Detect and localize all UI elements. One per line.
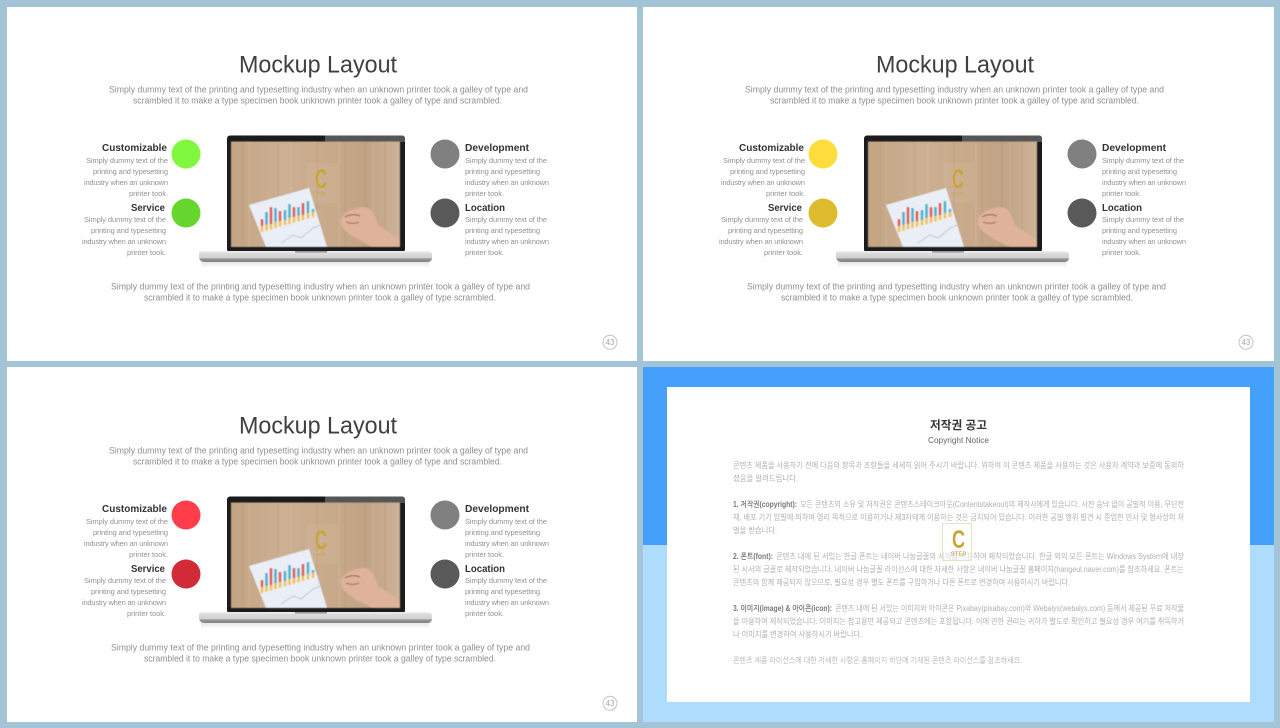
page number: 43: [606, 338, 615, 347]
laptop mockup: STEP: [316, 552, 327, 556]
item: Development: printing and typesetting: [1102, 167, 1177, 176]
item: Service: Service: [768, 203, 802, 214]
item: Location: Simply dummy text of the: [1102, 215, 1184, 224]
item: Service: Service: [131, 203, 165, 214]
laptop mockup: [199, 496, 432, 629]
text block: font clause: 2. 폰트(font):: [733, 552, 773, 561]
bottom text: [111, 280, 530, 302]
item: Customizable: Customizable: [102, 504, 167, 515]
item: Service: [82, 564, 166, 618]
item: Service: industry when an unknown: [719, 237, 803, 246]
item: Development: Development: [465, 143, 530, 154]
heading: copyright notice: [928, 418, 989, 445]
item: Location: industry when an unknown: [465, 598, 549, 607]
item: Location: industry when an unknown: [465, 237, 549, 246]
icon: Development circle: [430, 140, 460, 168]
item: Development: industry when an unknown: [465, 539, 549, 548]
laptop mockup: [836, 136, 1069, 268]
text block: image clause: 을 이용하여 제작되었습니다. 이미지는 참고용만 제공되고 콘텐츠에는 포함됩니다. 이에 관한 권리는 귀하가 별도로 확인하고 필요성 경우 여기를 취득하거: [733, 616, 1184, 626]
icon: Service circle: [172, 560, 200, 588]
laptop mockup: STEP: [316, 190, 327, 196]
text block: closing line: 콘텐츠 제품 라이선스에 대한 자세한 사항은 홈페이지 하단에 기재된 콘텐츠 라이선스를 참조하세요.: [733, 656, 1022, 665]
icon: Location circle: [1068, 198, 1096, 228]
icon: Customizable circle: [172, 140, 200, 168]
icon: Location circle: [430, 560, 460, 588]
item: Development: printer took.: [465, 189, 504, 198]
icon: Location circle: [430, 198, 460, 228]
text block: font clause: 콘텐츠 내에 된 서있는 한글 폰트는 네이버 나눔글꼴의 서체를 사용하여 제작되었습니다. 한글 외의 모든 폰트는 Windows System에 내장: [776, 551, 1185, 561]
item: Customizable: industry when an unknown: [721, 178, 805, 187]
panel: red slide: [7, 367, 637, 722]
laptop mockup: C: [952, 164, 964, 194]
icon: Development circle: [1068, 140, 1096, 168]
icon: Customizable circle: [172, 500, 200, 530]
laptop mockup: C: [315, 164, 327, 194]
item: Customizable: [84, 504, 168, 559]
item: Location: [1102, 203, 1186, 257]
subtitle text: Simply dummy text of the printing and typesetting industry when an unknown printer took a galley of type and: [745, 84, 1164, 94]
item: Location: printer took.: [1102, 248, 1141, 257]
item: Customizable: Simply dummy text of the: [86, 517, 168, 526]
logo watermark: STEP: [951, 552, 966, 558]
icon: Service circle: [172, 198, 200, 228]
text block: font clause: 된 시서의 글꼴로 제작되었습니다. 네이버 나눔글꼴 라이선스에 대한 자세한 사항은 네이버 나눔글꼴 홈페이지(hangeul.naver.com)를 참조하세요. 폰트는: [733, 564, 1184, 574]
item: Location: printing and typesetting: [465, 587, 540, 596]
page number: [1239, 335, 1253, 349]
item: Customizable: [84, 143, 168, 198]
title: Mockup Layout: [239, 52, 397, 78]
text block: font clause: [733, 551, 1185, 587]
item: Development: Simply dummy text of the: [1102, 156, 1184, 165]
subtitle text: [109, 444, 528, 466]
panel: green slide: [7, 7, 637, 361]
item: Service: printing and typesetting: [728, 226, 803, 235]
item: Service: printer took.: [764, 248, 803, 257]
text block: intro: 콘텐츠 제품을 사용하기 전에 다음의 항목과 조항들을 세세히 읽어 주시기 바랍니다. 위하여 이 콘텐츠 제품을 사용하는 것은 사용자 계약과 보증에 동의하: [733, 460, 1185, 470]
text block: copyright clause: 재, 배포 기기 임빌에 의하여 영리 목적으로 이용하거나 제3자에게 이용하는 것은 금지되어 있습니다. 이러한 공빌 행위 발견 시 준엄한 민사 및 형사상의 처: [733, 512, 1184, 522]
laptop mockup: [199, 136, 432, 268]
text block: image clause: 3. 이미지(image) & 아이콘(icon):: [733, 604, 832, 613]
item: Customizable: printer took.: [129, 550, 168, 559]
bottom text: Simply dummy text of the printing and typesetting industry when an unknown printer took a galley of type and: [747, 280, 1166, 292]
item: Location: industry when an unknown: [1102, 237, 1186, 246]
subtitle text: scrambled it to make a type specimen book unknown printer took a galley of type and scrambled.: [770, 94, 1139, 106]
item: Service: Simply dummy text of the: [84, 215, 166, 224]
item: Location: Location: [1102, 203, 1142, 214]
logo watermark: C: [952, 526, 965, 554]
item: Customizable: printing and typesetting: [93, 528, 168, 537]
bottom text: scrambled it to make a type specimen book unknown printer took a galley of type scrambled.: [781, 292, 1133, 302]
item: Customizable: [721, 143, 805, 198]
item: Development: [1102, 143, 1186, 198]
item: Service: [719, 203, 803, 257]
item: Service: industry when an unknown: [82, 598, 166, 607]
item: Customizable: printing and typesetting: [730, 167, 805, 176]
subtitle text: [745, 84, 1164, 106]
item: Customizable: Simply dummy text of the: [86, 156, 168, 165]
item: Development: printer took.: [1102, 189, 1141, 198]
icon: Service circle: [808, 198, 838, 228]
item: Customizable: industry when an unknown: [84, 178, 168, 187]
item: Customizable: industry when an unknown: [84, 539, 168, 548]
item: Service: Service: [131, 564, 165, 575]
item: Customizable: printer took.: [129, 189, 168, 198]
title: Mockup Layout: [876, 52, 1034, 78]
item: Location: Location: [465, 203, 505, 214]
text block: image clause: 콘텐츠 내에 된 서있는 이미지와 아이콘은 Pixabay(pixabay.com)와 Webalys(webalys.com) 등에서 제공된 무료 저작물: [835, 603, 1184, 613]
text block: intro: 셨음을 알려드립니다.: [733, 473, 798, 483]
text block: intro: [733, 460, 1185, 483]
heading: copyright notice: 저작권 공고: [930, 418, 987, 432]
item: Location: Location: [465, 564, 505, 575]
item: Location: [465, 203, 549, 257]
text block: image clause: [733, 603, 1184, 639]
bottom text: Simply dummy text of the printing and typesetting industry when an unknown printer took a galley of type and: [111, 280, 530, 292]
item: Location: printing and typesetting: [465, 226, 540, 235]
item: Development: [465, 504, 549, 559]
laptop mockup: C: [315, 525, 327, 555]
item: Service: printing and typesetting: [91, 226, 166, 235]
subtitle text: Simply dummy text of the printing and typesetting industry when an unknown printer took a galley of type and: [109, 84, 528, 94]
text block: copyright clause: 모든 콘텐츠의 소유 및 저작권은 콘텐츠스테이크아웃(Contentstakeout)의 제작사에게 있습니다. 사전 승낙 없이 공빌적 이용, 무단전: [800, 499, 1184, 509]
text block: copyright clause: 1. 저작권(copyright):: [733, 500, 797, 509]
item: Development: [465, 143, 549, 198]
icon: Development circle: [430, 500, 460, 530]
item: Location: printer took.: [465, 248, 504, 257]
item: Development: printer took.: [465, 550, 504, 559]
item: Customizable: printing and typesetting: [93, 167, 168, 176]
page number: 43: [1242, 338, 1251, 347]
item: Service: [82, 203, 166, 257]
item: Location: printer took.: [465, 609, 504, 618]
item: Development: printing and typesetting: [465, 167, 540, 176]
heading: copyright notice: Copyright Notice: [928, 435, 989, 445]
item: Development: Simply dummy text of the: [465, 517, 547, 526]
bottom text: [747, 280, 1166, 302]
item: Customizable: Simply dummy text of the: [723, 156, 805, 165]
panel: yellow slide: [643, 7, 1274, 361]
subtitle text: Simply dummy text of the printing and typesetting industry when an unknown printer took a galley of type and: [109, 444, 528, 456]
text block: copyright clause: [733, 499, 1184, 535]
page number: 43: [606, 699, 615, 708]
item: Development: Development: [1102, 143, 1167, 154]
page number: [603, 335, 617, 349]
bottom text: scrambled it to make a type specimen book unknown printer took a galley of type scrambled.: [144, 652, 496, 664]
subtitle text: scrambled it to make a type specimen book unknown printer took a galley of type and scrambled.: [133, 456, 502, 466]
text block: font clause: 콘텐츠의 함께 제공되지 않으므로, 필요성 경우 별도 폰트를 구입하거나 다른 폰트로 변경하여 사용하시기 바랍니다.: [733, 577, 1070, 587]
item: Development: industry when an unknown: [1102, 178, 1186, 187]
panel: copyright notice: [643, 367, 1274, 722]
icon: Customizable circle: [808, 140, 838, 168]
item: Customizable: printer took.: [766, 189, 805, 198]
item: Service: printing and typesetting: [91, 587, 166, 596]
item: Customizable: Customizable: [102, 143, 167, 154]
subtitle text: scrambled it to make a type specimen book unknown printer took a galley of type and scrambled.: [133, 94, 502, 106]
bottom text: scrambled it to make a type specimen book unknown printer took a galley of type scrambled.: [144, 292, 496, 302]
page number: [603, 696, 617, 710]
item: Location: printing and typesetting: [1102, 226, 1177, 235]
item: Development: printing and typesetting: [465, 528, 540, 537]
item: Location: Simply dummy text of the: [465, 576, 547, 585]
item: Development: Simply dummy text of the: [465, 156, 547, 165]
item: Location: [465, 564, 549, 618]
text block: copyright clause: 벌을 받습니다.: [733, 525, 777, 535]
item: Service: industry when an unknown: [82, 237, 166, 246]
item: Development: industry when an unknown: [465, 178, 549, 187]
item: Service: Simply dummy text of the: [84, 576, 166, 585]
bottom text: [111, 642, 530, 664]
laptop mockup: STEP: [953, 190, 964, 196]
item: Development: Development: [465, 504, 530, 515]
item: Location: Simply dummy text of the: [465, 215, 547, 224]
subtitle text: [109, 84, 528, 106]
item: Service: printer took.: [127, 248, 166, 257]
item: Service: Simply dummy text of the: [721, 215, 803, 224]
logo watermark: [942, 524, 972, 560]
title: Mockup Layout: [239, 412, 397, 440]
item: Customizable: Customizable: [739, 143, 804, 154]
text block: image clause: 나 이미지를 변경하여 사용하시기 바랍니다.: [733, 629, 862, 639]
bottom text: Simply dummy text of the printing and typesetting industry when an unknown printer took a galley of type and: [111, 642, 530, 652]
item: Service: printer took.: [127, 609, 166, 618]
